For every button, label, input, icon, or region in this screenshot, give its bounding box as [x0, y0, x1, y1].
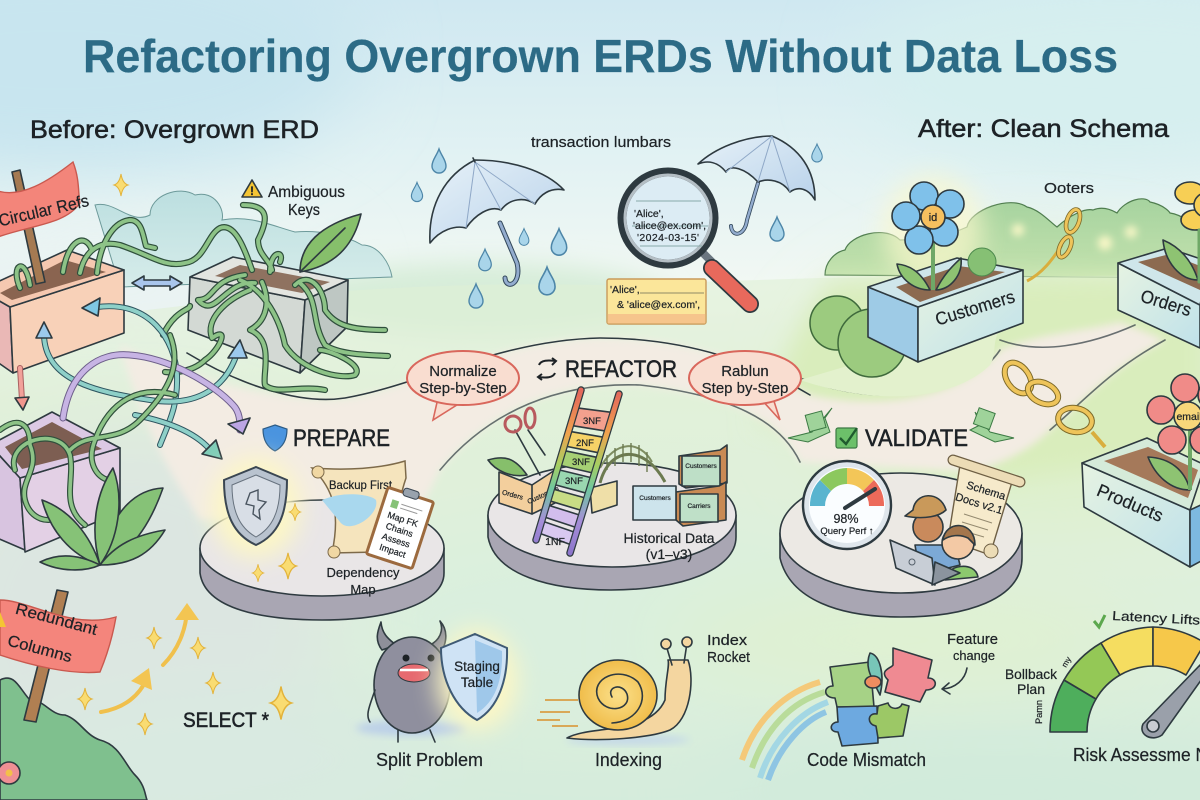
label: feature change [947, 631, 998, 663]
scroll: backup first map: Backup First [329, 478, 393, 492]
heading: prepare: PREPARE [293, 425, 390, 452]
hedges behind planters [95, 191, 1200, 287]
card: row data [607, 279, 706, 324]
planter: gray (tangled) [188, 257, 348, 373]
bushes by customers [810, 296, 906, 377]
sparkles on prepare platform [252, 503, 301, 582]
flower: yellow [1175, 182, 1200, 282]
icon: monster [356, 621, 466, 742]
label: ooters: Ooters [1044, 180, 1094, 197]
arrow: feature change [942, 668, 967, 694]
ladder: 3NF [565, 476, 583, 487]
icon: rainbow trail [742, 682, 828, 780]
label: dependency map: Map [350, 582, 376, 597]
planter: customers: Customers [933, 286, 1017, 330]
icon: snail [537, 637, 692, 745]
planter: customers [868, 175, 1023, 362]
ladder: 3NF [583, 416, 601, 427]
label: feature change: change [953, 648, 995, 663]
callout: normalize: Step-by-Step [419, 380, 507, 397]
icon: spiky plant [40, 468, 165, 570]
sparkles and gold arrows [78, 603, 292, 735]
clipboard: checklist: Impact [378, 542, 407, 560]
icon: puzzle pieces [826, 648, 935, 746]
lower tangled vines [0, 335, 175, 525]
platform: refactor [488, 463, 736, 590]
label: rollback plan [1005, 655, 1073, 724]
planter box with scissors: Customers [527, 485, 561, 506]
scroll: backup first map [312, 461, 406, 558]
code anti-pattern: select star: SELECT * [183, 709, 269, 732]
heading: after: After: Clean Schema [918, 115, 1169, 143]
stacked data boxes: Customers [685, 463, 717, 470]
label: ambiguous keys [242, 180, 345, 219]
tangled vines [17, 205, 388, 390]
magnifier: 'alice@ex.com', [633, 220, 706, 232]
icon: staging shield: Staging [454, 659, 500, 674]
ribbons with checks [788, 408, 1014, 442]
arrowheads [15, 276, 250, 459]
planter: orders [1118, 240, 1200, 348]
ladder: 1NF [545, 536, 565, 548]
beige box [590, 481, 617, 513]
callout: rablun: Rablun [721, 363, 769, 380]
heading: prepare [263, 425, 390, 452]
label: latency lifts [1094, 608, 1200, 628]
heading: refactor: REFACTOR [565, 356, 677, 383]
planter: pink (tangled) [0, 250, 124, 373]
planter: products: Products [1094, 480, 1166, 526]
gauge: query performance [803, 461, 891, 549]
sparkle [114, 174, 128, 196]
heading: before: Before: Overgrown ERD [30, 116, 319, 144]
clipboard: checklist: Assess [381, 531, 412, 550]
label: latency lifts: Latency Lifts [1112, 608, 1200, 628]
label: historical data: (v1–v3) [646, 546, 692, 562]
flower: email [1147, 374, 1200, 454]
stacked data boxes: Carriers [687, 503, 711, 510]
gauge: query performance: 98% [833, 512, 859, 526]
gauge: risk assessment [1050, 627, 1200, 732]
gauge needle [1142, 665, 1200, 738]
label: historical data [623, 530, 715, 562]
callout: rablun [689, 351, 801, 420]
planter: products [1082, 430, 1200, 567]
scroll: schema docs [948, 460, 1020, 558]
label: rollback plan: Bollback [1005, 666, 1058, 682]
label: index rocket: Rocket [707, 649, 751, 666]
planter box with scissors: Orders [501, 489, 524, 502]
planter: orders: Orders [1138, 286, 1194, 320]
gauge: query performance: Query Perf ↑ [820, 526, 874, 537]
label: rollback plan: my [1060, 655, 1073, 669]
tangled reference arrows [20, 306, 240, 452]
callout: rablun: Step by-Step [702, 380, 788, 397]
people with laptop [890, 496, 978, 585]
icon: leaf on gray planter [300, 214, 361, 272]
platform: prepare [200, 500, 444, 620]
callout: normalize [407, 351, 519, 420]
sign: circular refs [0, 162, 91, 284]
stacked data boxes: Customers [639, 495, 671, 502]
bush: bottom left [0, 678, 147, 800]
chain: link to products [999, 358, 1105, 447]
label: index rocket [707, 632, 751, 666]
flower: id [892, 182, 964, 254]
magnifier: '2024-03-15' [637, 232, 699, 244]
icon: small flower [0, 762, 20, 784]
magnifier: 'Alice', [634, 208, 664, 220]
card: row data: 'Alice', [610, 284, 640, 296]
flower: id: id [929, 212, 937, 224]
planter: lilac (tangled) [0, 412, 120, 552]
icon: staging shield [437, 630, 517, 730]
platform: validate [780, 473, 1022, 617]
label: dependency map [326, 565, 400, 597]
ground: meadow and stone path [0, 275, 1200, 800]
bridge [600, 443, 665, 483]
label: indexing: Indexing [595, 750, 662, 770]
umbrella left [430, 158, 564, 284]
ladder: 2NF [576, 438, 594, 449]
heading: validate: VALIDATE [865, 425, 968, 452]
sign: redundant columns [0, 590, 116, 722]
clipboard: checklist: Map FK [386, 510, 419, 529]
label: code mismatch: Code Mismatch [807, 750, 926, 770]
label: historical data: Historical Data [623, 530, 715, 546]
label: ambiguous keys: Keys [288, 202, 320, 219]
sign: redundant columns: Redundant [13, 601, 100, 639]
label: split problem: Split Problem [376, 750, 483, 770]
label: index rocket: Index [707, 632, 748, 649]
label: rollback plan: Plan [1017, 681, 1045, 697]
label: transaction: transaction lumbars [531, 134, 671, 151]
stacked data boxes [633, 445, 727, 526]
label: dependency map: Dependency [326, 565, 400, 580]
icon: staging shield: Table [461, 675, 493, 690]
planter box with scissors [488, 408, 561, 514]
card: row data: & 'alice@ex.com', [617, 299, 700, 311]
glowing shield [212, 458, 300, 558]
ladder: 3NF [572, 457, 590, 468]
clipboard: checklist [366, 483, 435, 569]
scroll: schema docs: Docs v2.1 [954, 491, 1004, 517]
label: ambiguous keys: ! [250, 184, 254, 198]
label: ambiguous keys: Ambiguous [268, 184, 345, 201]
label: rollback plan: Pamn [1034, 700, 1044, 724]
chain: link to orders [1027, 208, 1083, 281]
callout: normalize: Normalize [429, 363, 497, 380]
umbrella right [698, 136, 815, 234]
clipboard: checklist: Chains [385, 521, 415, 539]
label: feature change: Feature [947, 631, 998, 648]
ladder [536, 390, 619, 553]
scroll: schema docs: Schema [965, 479, 1008, 503]
sign: redundant columns: Columns [6, 633, 74, 666]
magnifier [622, 172, 750, 304]
title: Refactoring Overgrown ERDs Without Data Loss [83, 30, 1118, 82]
rain drops [411, 144, 822, 308]
